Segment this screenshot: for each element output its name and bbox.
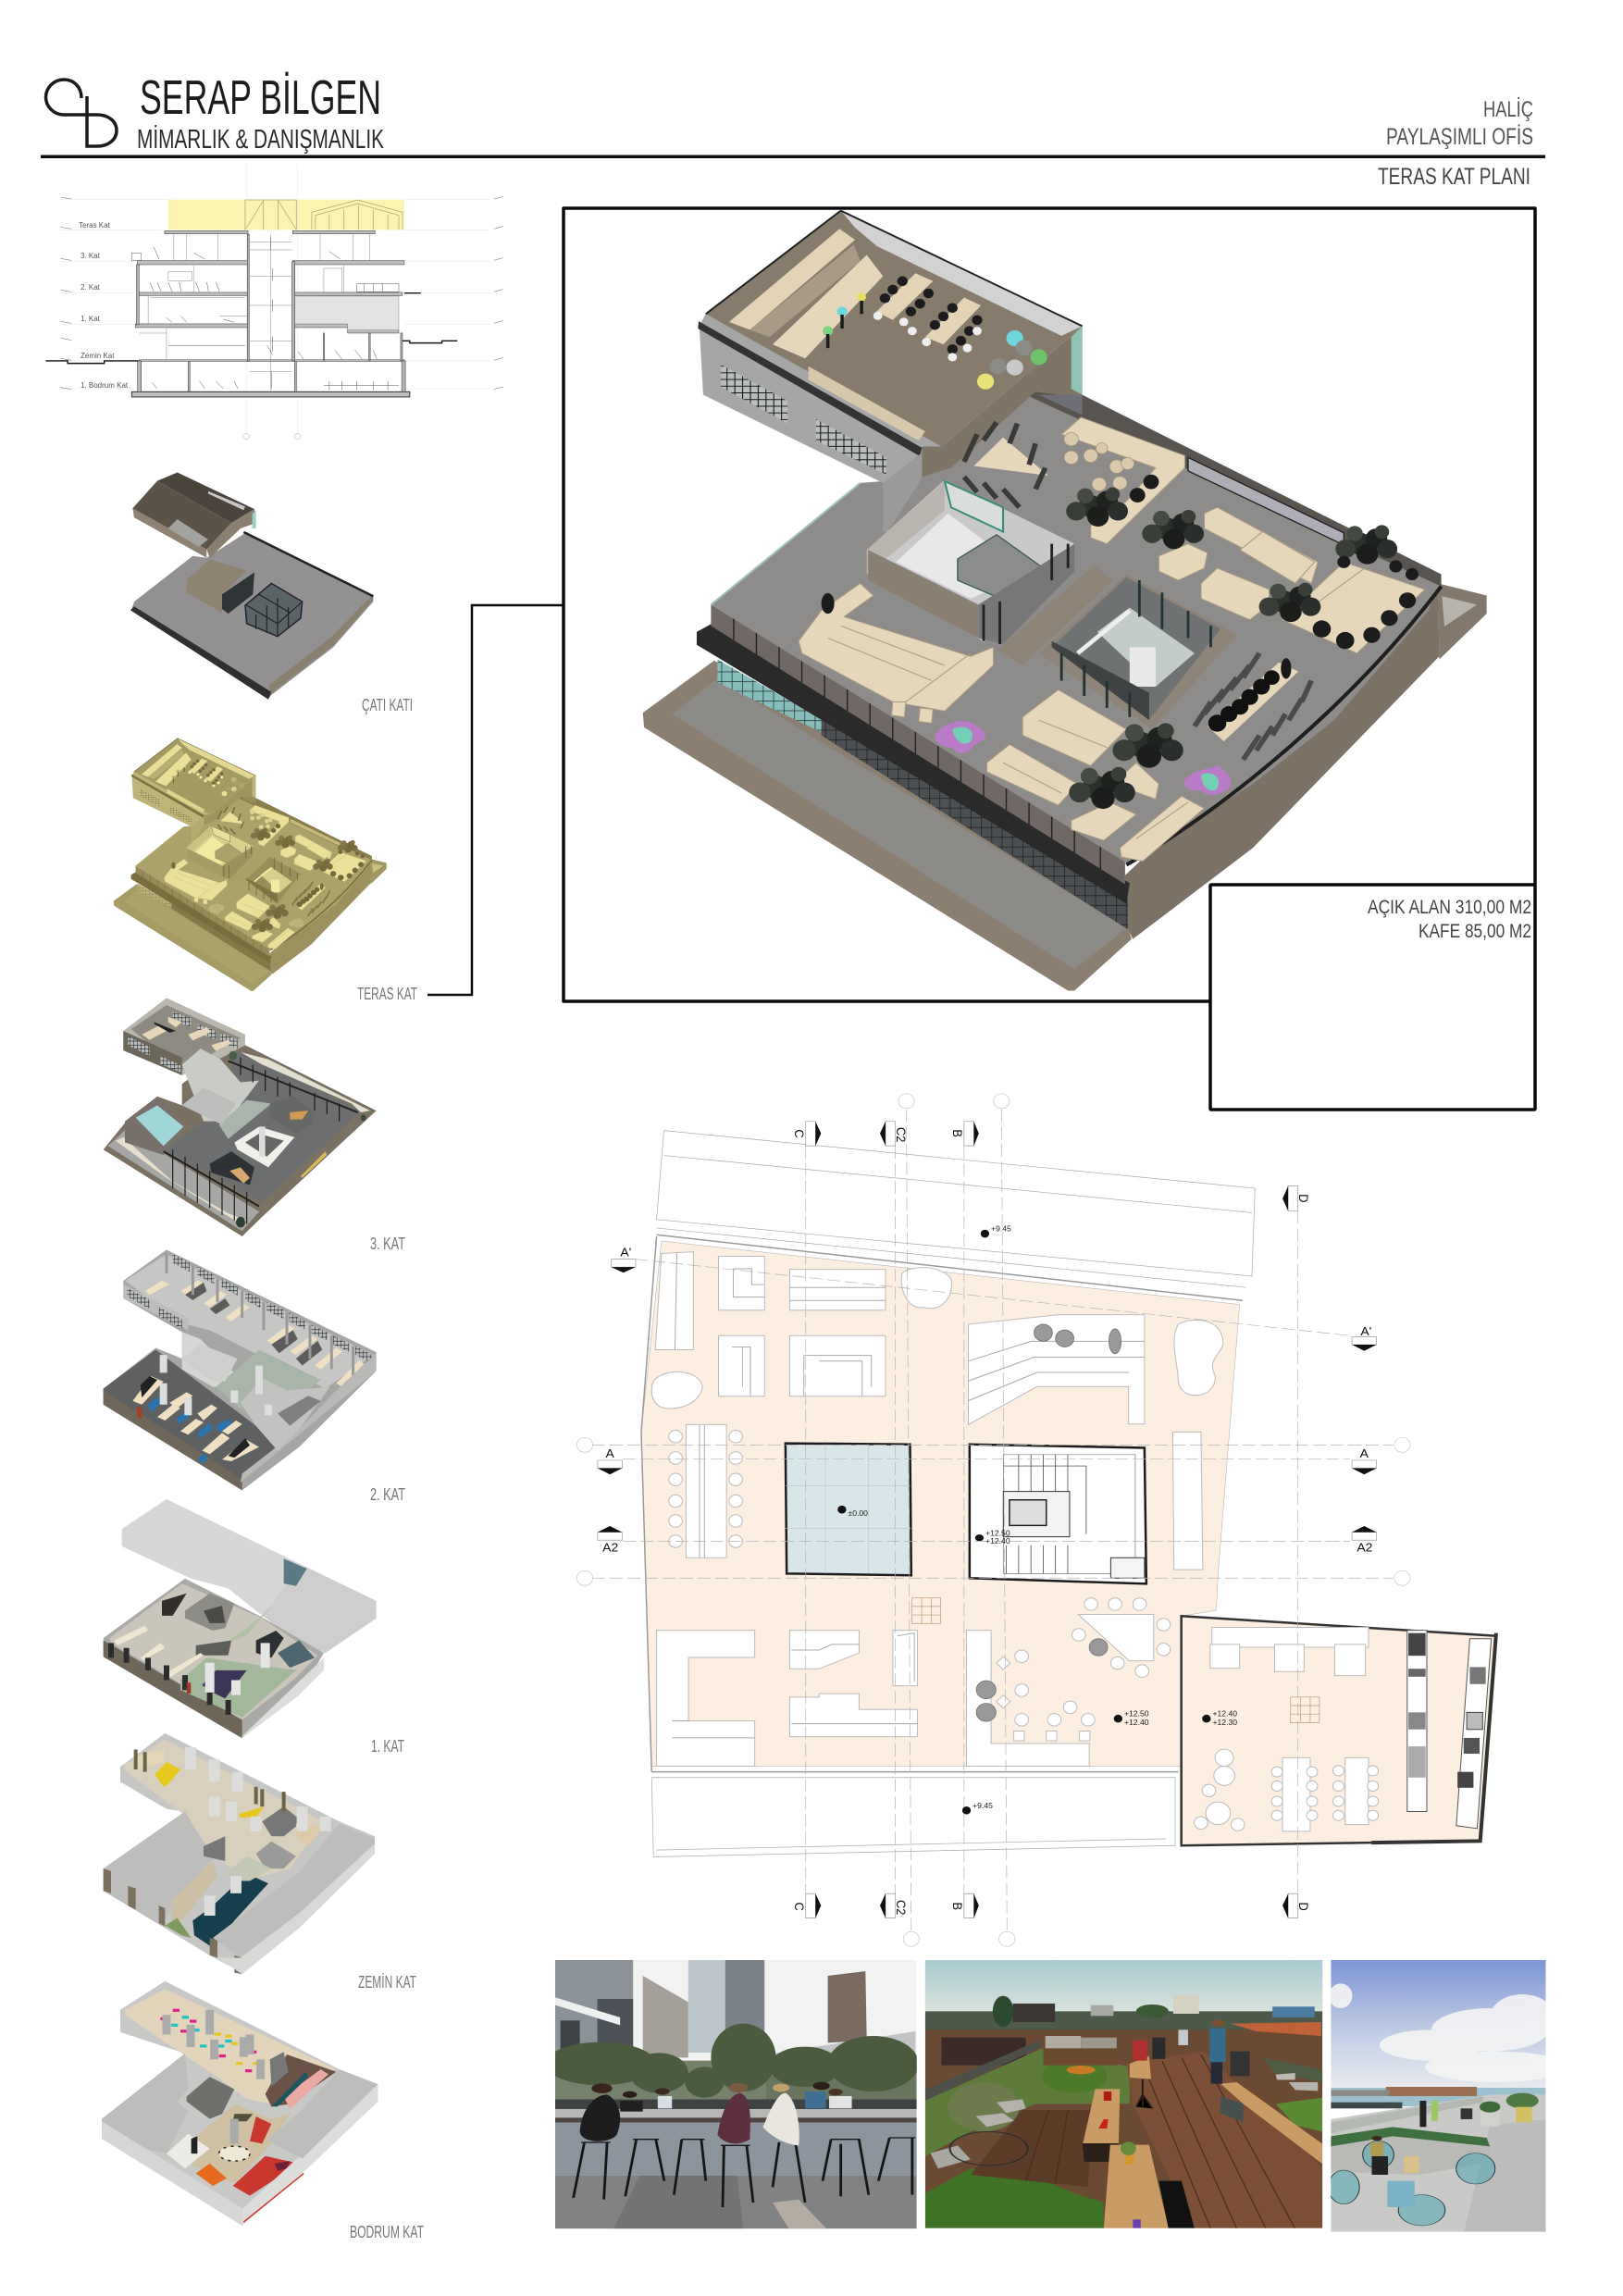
hatched storage xyxy=(294,296,399,330)
parapet and dark band xyxy=(697,604,1130,904)
label: roof floor: ÇATI KATI xyxy=(362,696,413,714)
section labels: A2 xyxy=(1357,1541,1372,1554)
section labels: C xyxy=(792,1129,806,1138)
people in plan xyxy=(976,1324,1121,1721)
terrace furniture xyxy=(651,1252,1223,1767)
section labels: B xyxy=(950,1129,964,1137)
elevation marks: +12.40 xyxy=(1212,1709,1237,1719)
towers xyxy=(555,1960,915,2101)
floor plan xyxy=(576,1094,1496,1946)
upper block front wall xyxy=(698,314,945,531)
stair core void xyxy=(1052,577,1220,720)
section labels: C2 xyxy=(894,1127,908,1142)
terrace deck xyxy=(1331,2094,1545,2232)
pallet seating xyxy=(1044,2036,1118,2066)
corridor paving xyxy=(997,565,1113,665)
brick building and left rail xyxy=(925,2038,1042,2101)
section labels: A2 xyxy=(602,1541,618,1554)
tree band xyxy=(545,2024,919,2099)
section labels: A' xyxy=(1360,1325,1371,1338)
elevation marks: +12.50 xyxy=(1124,1709,1149,1719)
axonometric: terrace floor (highlighted) xyxy=(114,738,387,991)
label: basement floor: BODRUM KAT xyxy=(350,2223,424,2241)
axonometric: basement floor xyxy=(102,1981,378,2226)
section labels: D xyxy=(1296,1194,1310,1203)
section labels: A xyxy=(1360,1446,1369,1460)
cafe furniture xyxy=(1195,1628,1379,1831)
terrain lines xyxy=(45,293,457,364)
label: second floor: 2. KAT xyxy=(370,1485,405,1504)
back parapet xyxy=(711,387,1442,865)
elevation ticks xyxy=(60,197,503,390)
parapet walls xyxy=(641,1235,1243,1772)
bar stools xyxy=(574,2138,915,2207)
main panel frame xyxy=(564,208,1535,1001)
project name: PAYLAŞIMLI OFİS xyxy=(1386,123,1533,150)
elevation marks: +12.50 xyxy=(985,1529,1010,1537)
site outlines xyxy=(651,1131,1255,1856)
level labels: 3. Kat xyxy=(81,252,101,260)
inset area box xyxy=(1210,885,1535,1110)
kitchen counter xyxy=(1407,1631,1492,1829)
grid bubbles xyxy=(243,434,301,440)
grid bubbles xyxy=(576,1094,1410,1946)
elevation marks xyxy=(962,1224,1237,1815)
axonometric: first floor xyxy=(104,1499,377,1738)
clouds xyxy=(1329,1983,1567,2082)
lower deck xyxy=(643,661,1132,991)
project location: HALİÇ xyxy=(1483,97,1533,122)
triangular table xyxy=(964,422,1048,507)
bar counter xyxy=(555,2099,917,2228)
cafe floor area xyxy=(1182,1616,1496,1845)
label: third floor: 3. KAT xyxy=(370,1235,405,1253)
plants xyxy=(1066,475,1419,809)
photo: rooftop bar xyxy=(545,1960,919,2228)
grid axes xyxy=(592,1109,1394,1930)
section labels: A xyxy=(605,1446,614,1460)
highlight: terrace level xyxy=(168,200,404,230)
seated person and boxes xyxy=(1370,2136,1419,2207)
elevation marks: +12.40 xyxy=(1124,1718,1149,1727)
level labels: 2. Kat xyxy=(81,283,101,292)
crowd xyxy=(1098,2020,1250,2228)
axonometric: second floor xyxy=(104,1250,377,1490)
axonometric: third floor xyxy=(104,998,377,1236)
cushions and chair xyxy=(930,2073,1318,2168)
teal chairs xyxy=(1328,2141,1495,2226)
axonometric: ground floor xyxy=(104,1733,375,1974)
walls xyxy=(136,234,405,391)
stair core xyxy=(970,1445,1146,1583)
sheet title: TERAS KAT PLANI xyxy=(1378,164,1530,190)
stools and seats xyxy=(669,1430,1171,1741)
terrace floor xyxy=(711,395,1442,863)
section labels: A' xyxy=(620,1246,631,1259)
section labels xyxy=(602,1127,1372,1915)
section labels: C2 xyxy=(894,1900,908,1915)
planter xyxy=(1331,2093,1539,2175)
elevation marks: +9.45 xyxy=(973,1801,993,1810)
label: first floor: 1. KAT xyxy=(371,1737,404,1756)
elevation marks: +9.45 xyxy=(991,1224,1011,1234)
colorful rugs xyxy=(935,721,1231,795)
atrium xyxy=(786,1444,911,1575)
distant people xyxy=(1419,2101,1532,2127)
upper block side wall xyxy=(922,326,1083,477)
floor slabs xyxy=(131,230,410,397)
subtitle: firm descriptor: MİMARLIK & DANIŞMANLIK xyxy=(137,124,384,155)
building section drawing xyxy=(45,164,503,440)
label: terrace floor: TERAS KAT xyxy=(357,985,417,1003)
atrium: ±0.00 xyxy=(848,1508,868,1518)
furniture xyxy=(131,238,399,391)
people at bar xyxy=(580,2082,852,2145)
planting xyxy=(925,2048,1322,2228)
elevation marks: +12.40 xyxy=(985,1536,1010,1545)
wooden deck lighter zone xyxy=(1126,2052,1322,2228)
section labels: B xyxy=(950,1902,964,1910)
label: ground floor: ZEMİN KAT xyxy=(358,1973,416,1992)
elevation marks: +12.30 xyxy=(1212,1718,1237,1727)
terrace floor area xyxy=(641,1241,1240,1767)
upper block floor and back wall xyxy=(706,211,1083,447)
logo: SB monogram xyxy=(46,80,117,146)
axonometric: roof floor xyxy=(130,473,373,700)
benches xyxy=(1083,2056,1322,2228)
connector line from teras kat to main panel xyxy=(427,605,564,995)
cafe area figure: KAFE 85,00 M2 xyxy=(1419,921,1531,942)
harbor xyxy=(1331,2087,1545,2108)
north/scale stamps xyxy=(911,1598,1319,1722)
deck planks xyxy=(1026,2054,1295,2228)
cafe tables and stools xyxy=(823,273,1047,390)
lounge seating xyxy=(799,417,1425,862)
photo: concrete terrace with teal chairs xyxy=(1331,1960,1545,2232)
level labels: Teras Kat xyxy=(79,221,111,230)
title: firm name: SERAP BİLGEN xyxy=(140,71,381,125)
stool group xyxy=(1064,432,1134,490)
section markers xyxy=(598,1122,1377,1918)
glass facade xyxy=(717,659,1128,929)
person xyxy=(822,593,835,614)
atrium void xyxy=(867,480,1074,644)
long dining table xyxy=(1195,653,1311,760)
section labels: D xyxy=(1296,1902,1310,1911)
level labels: 1. Bodrum Kat xyxy=(81,381,129,390)
level labels xyxy=(79,221,129,390)
photo: wooden roof deck garden xyxy=(925,1960,1322,2228)
main axonometric of terrace floor xyxy=(643,211,1487,991)
right exterior wall xyxy=(1125,583,1487,939)
header rule xyxy=(41,155,1545,158)
section labels: C xyxy=(792,1902,806,1911)
level labels: Zemin Kat xyxy=(81,352,115,360)
skyline xyxy=(925,1995,1322,2036)
level labels: 1. Kat xyxy=(81,315,101,323)
open area figure: AÇIK ALAN 310,00 M2 xyxy=(1368,897,1531,918)
